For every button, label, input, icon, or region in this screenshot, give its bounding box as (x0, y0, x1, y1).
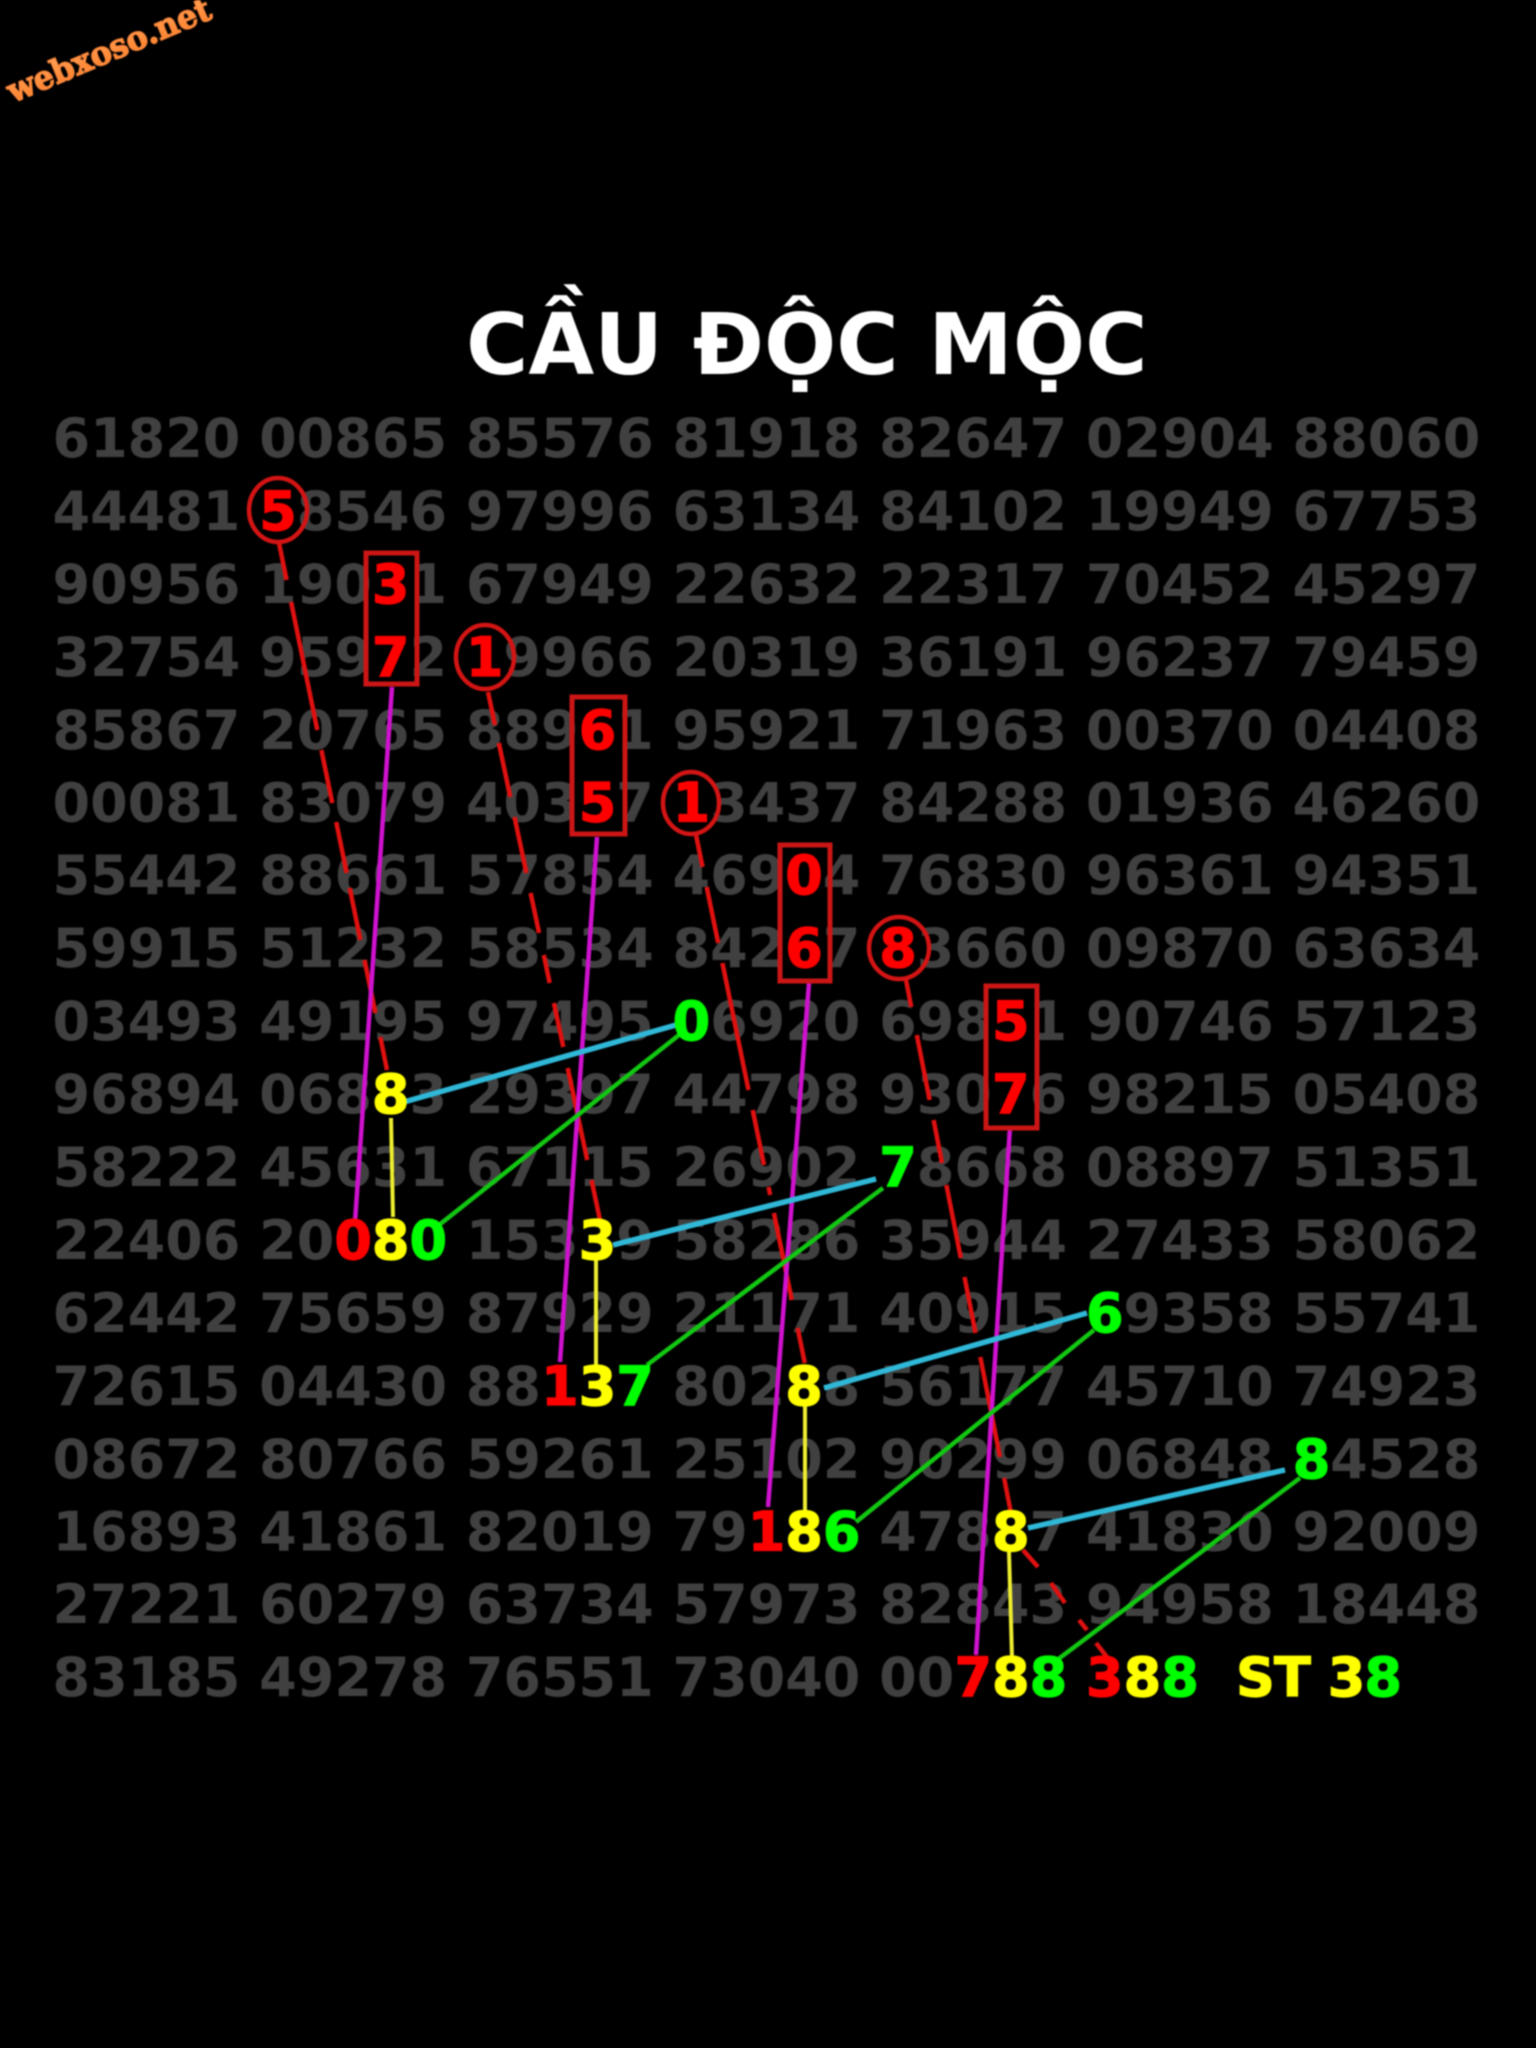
background number grid: 16893 41861 82019 79186 47887 41830 92009 (52, 1500, 1480, 1564)
number 186, row 16: 1 (748, 1500, 785, 1564)
background number grid: 27221 60279 63734 57973 82843 94958 18448 (52, 1573, 1480, 1636)
number 080, row 12: 8 (372, 1209, 409, 1272)
yellow connector lines (391, 1118, 1012, 1658)
boxed digits 0 and 6: 6 (785, 917, 823, 980)
circled digit 1, row 6: 1 (673, 772, 710, 834)
number 080, row 12 (334, 1209, 447, 1272)
background number grid: 03493 49195 97495 06920 69851 90746 57123 (52, 990, 1480, 1053)
background number grid: 55442 88661 57854 46904 76830 96361 94351 (52, 844, 1480, 907)
green digit 8, row 15: 8 (1293, 1428, 1330, 1491)
background number grid: 00081 83079 40357 13437 84288 01936 46260 (52, 772, 1480, 834)
boxed digits 6 and 5 (572, 697, 625, 834)
number 137, row 14: 3 (579, 1355, 616, 1418)
number 788, row 18 (955, 1646, 1067, 1709)
green digit 0, row 9: 0 (673, 990, 710, 1053)
background number grid: 72615 04430 88137 80288 56177 45710 74923 (52, 1355, 1480, 1418)
number 388, row 18 (1086, 1646, 1199, 1709)
boxed digits 0 and 6 (780, 844, 830, 981)
number 186, row 16 (748, 1500, 860, 1564)
number 788, row 18: 7 (955, 1646, 992, 1709)
background number grid: 59915 51232 58534 84267 83660 09870 63634 (52, 917, 1480, 980)
circled digit 1, row 6 (663, 772, 719, 834)
yellow digit 8, row 10: 8 (372, 1063, 409, 1126)
number 788, row 18: 8 (992, 1646, 1030, 1709)
boxed digits 6 and 5: 5 (579, 772, 616, 834)
number 080, row 12: 0 (410, 1209, 447, 1272)
circled digit 8: 8 (879, 917, 917, 980)
background number grid: 22406 20080 15339 58286 35944 27433 58062 (52, 1209, 1480, 1272)
background number grid: 90956 19031 67949 22632 22317 70452 45297 (52, 553, 1480, 616)
circled digit 8 (869, 917, 929, 980)
background number grid (52, 407, 1480, 1709)
circled digit 1, row 4 (456, 625, 514, 689)
boxed digits 6 and 5: 6 (579, 699, 616, 762)
number 137, row 14 (541, 1355, 654, 1418)
green digit 6, row 13: 6 (1086, 1282, 1124, 1345)
red dashed lines (279, 543, 1107, 1657)
magenta lines (355, 687, 1010, 1655)
yellow digit 8, row 16: 8 (992, 1500, 1030, 1564)
cyan connector lines (404, 1025, 1285, 1528)
background number grid: 08672 80766 59261 25102 90299 06848 84528 (52, 1428, 1480, 1491)
background number grid: 61820 00865 85576 81918 82647 02904 88060 (52, 407, 1480, 470)
circled digit 5: 5 (259, 480, 297, 543)
background number grid: 58222 45631 67115 26902 78668 08897 51351 (52, 1136, 1480, 1199)
number 186, row 16: 6 (823, 1500, 860, 1564)
title: CẦU ĐỘC MỘC (466, 284, 1147, 395)
yellow digit 8, row 14: 8 (785, 1355, 823, 1418)
background number grid: 32754 95972 19966 20319 36191 96237 79459 (52, 626, 1480, 689)
background number grid: 62442 75659 87929 21171 40915 69358 55741 (52, 1282, 1480, 1345)
circled digit 5 (249, 478, 307, 543)
result: ST 38: ST 38 (1236, 1646, 1402, 1709)
boxed digits 5 and 7 (986, 986, 1037, 1128)
yellow digit 3, row 12: 3 (579, 1209, 616, 1272)
number 137, row 14: 1 (541, 1355, 579, 1418)
boxed digits 3 and 7 (366, 553, 417, 689)
boxed digits 0 and 6: 0 (785, 844, 823, 907)
green connector lines (439, 1035, 1300, 1660)
background number grid: 85867 20765 88961 95921 71963 00370 04408 (52, 699, 1480, 762)
boxed digits 3 and 7: 3 (372, 553, 409, 616)
boxed digits 5 and 7: 7 (992, 1063, 1030, 1126)
green digit 7, row 11: 7 (879, 1136, 917, 1199)
number 137, row 14: 7 (616, 1355, 654, 1418)
boxed digits 5 and 7: 5 (992, 990, 1030, 1053)
circled digit 1, row 4: 1 (466, 626, 503, 689)
background number grid: 96894 06883 29397 44798 93076 98215 05408 (52, 1063, 1480, 1126)
number 388, row 18: 8 (1161, 1646, 1199, 1709)
background number grid: 44481 58546 97996 63134 84102 19949 67753 (52, 480, 1480, 543)
number 388, row 18: 3 (1086, 1646, 1124, 1709)
background number grid: 83185 49278 76551 73040 00788 388 (52, 1646, 1199, 1709)
boxed digits 3 and 7: 7 (372, 626, 409, 689)
number 080, row 12: 0 (334, 1209, 372, 1272)
number 186, row 16: 8 (785, 1500, 823, 1564)
number 788, row 18: 8 (1030, 1646, 1067, 1709)
number 388, row 18: 8 (1124, 1646, 1161, 1709)
